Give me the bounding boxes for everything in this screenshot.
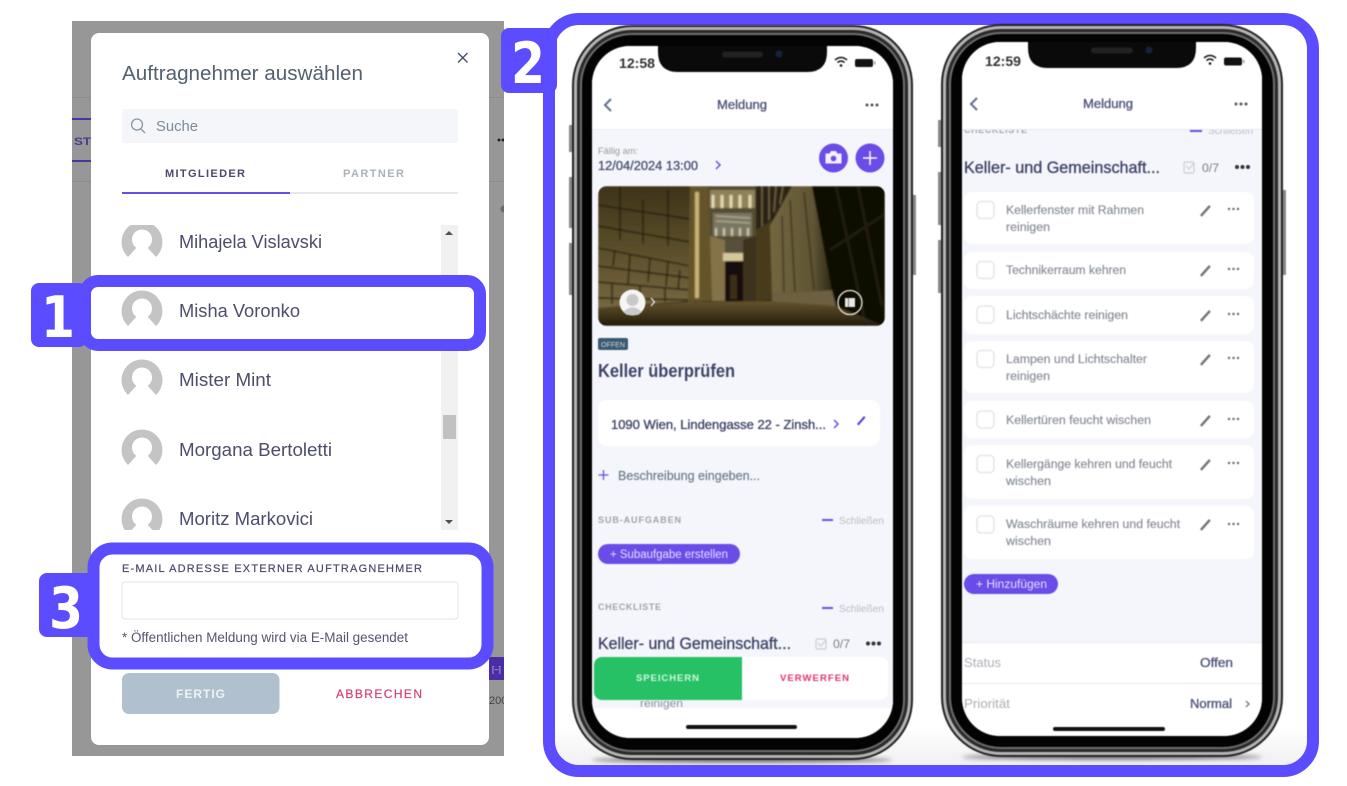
- save and discard bar: VERWERFEN: [780, 673, 849, 684]
- status row: Status: [964, 656, 1001, 670]
- checklist item 2: Technikerraum kehren: [1006, 265, 1126, 277]
- icon: add button: [856, 144, 884, 172]
- status row: [962, 642, 1262, 684]
- phone 1: task overview: [569, 25, 916, 762]
- panel 2: mobile app frame: [549, 19, 1313, 771]
- phone 2: checklist: [938, 24, 1286, 760]
- priority row: [964, 697, 1249, 711]
- status bar: 12:59: [985, 53, 1021, 69]
- member: Misha Voronko: [122, 290, 300, 326]
- checklist title: 0/7: [1202, 161, 1219, 175]
- corridor depth: [710, 236, 725, 301]
- email input: [122, 582, 458, 619]
- status bar: [619, 56, 876, 69]
- member: Moritz Markovici: Moritz Markovici: [179, 509, 313, 529]
- email note: * Öffentlichen Meldung wird via E-Mail gesendet: [122, 630, 408, 645]
- badge 1: [31, 283, 87, 351]
- description row: Beschreibung eingeben...: [618, 469, 760, 483]
- tabs: [122, 168, 458, 194]
- dimmed app background: ST: [74, 136, 91, 148]
- phone 1 shell: [569, 25, 916, 762]
- button: Fertig: FERTIG: [176, 687, 225, 701]
- checklist header: CHECKLISTE: [598, 602, 661, 612]
- icon: gallery: [838, 290, 862, 314]
- checklist header: [598, 603, 884, 612]
- button: Fertig: [122, 673, 280, 714]
- navigation bar: Meldung: [1083, 97, 1133, 111]
- checklist item 6: [964, 445, 1254, 499]
- checklist title: Keller- und Gemeinschaft...: [964, 158, 1160, 177]
- navigation bar: Meldung: [717, 98, 767, 112]
- checklist header: Schließen: [839, 603, 884, 615]
- address card: 1090 Wien, Lindengasse 22 - Zinsh...: [611, 417, 826, 432]
- checklist title: [598, 636, 882, 650]
- status chip: OFFEN: [601, 342, 625, 349]
- member: Morgana Bertoletti: [122, 430, 331, 465]
- iron bars: [756, 186, 791, 228]
- floor: [598, 301, 885, 326]
- clipped checklist header: [964, 125, 1253, 137]
- member: Mihajela Vislavski: [122, 225, 321, 257]
- navigation bar: [605, 98, 878, 112]
- checklist title: 0/7: [833, 637, 850, 651]
- badge 2: [501, 28, 557, 97]
- checklist item 1: Kellerfenster mit Rahmen: [1006, 205, 1144, 217]
- icon: close: [458, 53, 468, 62]
- status bar: [985, 53, 1244, 69]
- search field: [122, 109, 458, 143]
- button: Abbrechen: ABBRECHEN: [336, 687, 422, 701]
- member: Moritz Markovici: [122, 498, 312, 530]
- member: Mihajela Vislavski: Mihajela Vislavski: [179, 232, 322, 252]
- phone 2 shell: [938, 24, 1286, 760]
- checklist item 7: wischen: [1005, 536, 1051, 548]
- phone 1 screen: [592, 46, 893, 738]
- save and discard bar: [594, 657, 888, 700]
- tabs: MITGLIEDER: [165, 168, 245, 180]
- priority row: Priorität: [964, 697, 1011, 711]
- tabs: PARTNER: [343, 168, 404, 180]
- member list: [122, 222, 474, 541]
- checklist item 1: reinigen: [1006, 222, 1050, 234]
- checklist item 5: Kellertüren feucht wischen: [1006, 415, 1151, 427]
- highlight 3: external email box: [94, 548, 488, 664]
- checklist item 4: Lampen und Lichtschalter: [1006, 354, 1147, 366]
- status bar: 12:58: [619, 55, 655, 71]
- address card: [598, 400, 880, 446]
- checklist title: Keller- und Gemeinschaft...: [598, 634, 791, 653]
- checklist item 2: [964, 252, 1254, 289]
- checklist item 4: [964, 341, 1254, 393]
- notch: [1028, 42, 1196, 68]
- status row: Offen: [1200, 656, 1233, 670]
- badge 3: [39, 573, 95, 642]
- corridor ceiling and slats: [708, 186, 756, 240]
- due date: 12/04/2024 13:00: [598, 158, 698, 173]
- checklist item 3: Lichtschächte reinigen: [1006, 310, 1128, 322]
- clipped checklist header: Schließen: [1208, 125, 1253, 137]
- right plank wall: [770, 186, 832, 294]
- member: Mister Mint: Mister Mint: [179, 370, 271, 390]
- search field: Suche: [156, 118, 198, 135]
- phone 2 screen: [962, 42, 1262, 736]
- save and discard bar: SPEICHERN: [636, 673, 699, 684]
- home indicator: [686, 725, 797, 729]
- home indicator: [1053, 727, 1165, 731]
- button: add subtask: + Subaufgabe erstellen: [610, 549, 728, 561]
- due date: Fällig am:: [598, 146, 638, 156]
- checklist item 6: Kellergänge kehren und feucht: [1006, 459, 1173, 471]
- checklist item 5: [964, 401, 1254, 438]
- dimmed app background: 200: [489, 695, 507, 707]
- task title: Keller überprüfen: [598, 361, 735, 381]
- left brick wall: [598, 186, 690, 308]
- dialog title: Auftragnehmer auswählen: [122, 63, 363, 85]
- status chip: [598, 338, 628, 350]
- panel: assignee dialog screenshot: [72, 21, 508, 756]
- scrollbar: [441, 225, 458, 530]
- obscured row text: reinigen: [640, 698, 683, 710]
- member: Morgana Bertoletti: Morgana Bertoletti: [179, 440, 332, 460]
- lit pillar: [688, 186, 712, 302]
- button: add item: + Hinzufügen: [976, 579, 1047, 591]
- icon: camera button: [819, 144, 848, 172]
- dimmed app background: [72, 21, 508, 756]
- priority row: Normal: [1190, 697, 1232, 711]
- dialog card: [91, 33, 489, 745]
- member: Misha Voronko: Misha Voronko: [179, 301, 300, 321]
- subtasks header: Schließen: [839, 515, 884, 527]
- button: add subtask: [598, 544, 740, 564]
- cellar photo: [598, 186, 885, 326]
- button: add item: [964, 574, 1058, 594]
- dark right side: [812, 186, 885, 326]
- highlight 1: member row: [85, 281, 480, 345]
- navigation bar: [971, 97, 1248, 111]
- badge 1: 1: [41, 285, 75, 351]
- checklist item 4: reinigen: [1006, 371, 1050, 383]
- assignee avatar on photo: [620, 290, 654, 316]
- subtasks header: SUB-AUFGABEN: [598, 515, 681, 525]
- clipped checklist header: CHECKLISTE: [964, 125, 1027, 135]
- badge 2: 2: [511, 31, 545, 97]
- dimmed app background: [–]: [492, 665, 501, 674]
- checklist item 1: [964, 192, 1254, 244]
- subtasks header: [598, 516, 884, 524]
- checklist item 7: Waschräume kehren und feucht: [1006, 519, 1181, 531]
- checklist item 7: [964, 506, 1254, 559]
- due date: [598, 147, 722, 171]
- badge 3: 3: [49, 576, 83, 642]
- notch: [658, 46, 827, 72]
- external email label: E-MAIL ADRESSE EXTERNER AUFTRAGNEHMER: [122, 563, 422, 575]
- checklist item 3: [964, 296, 1254, 334]
- member: Mister Mint: [122, 360, 271, 395]
- checklist item 6: wischen: [1005, 476, 1051, 488]
